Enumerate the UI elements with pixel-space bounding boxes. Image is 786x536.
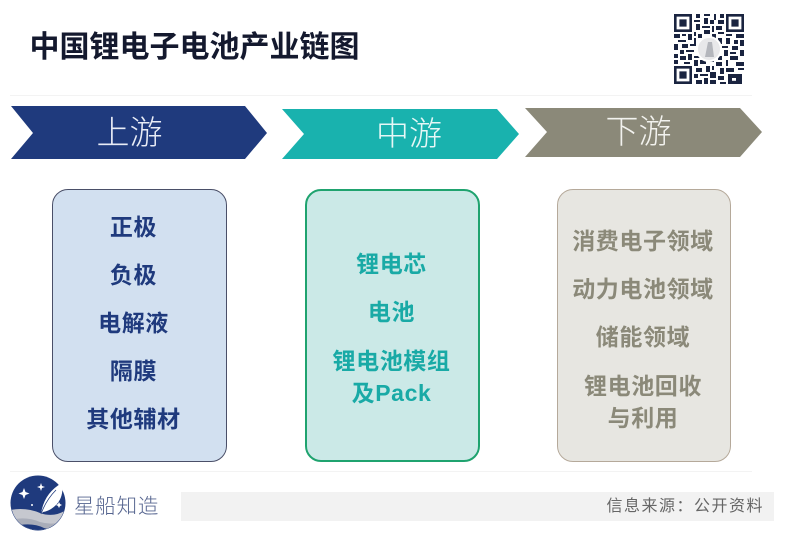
item: 锂电池回收与利用 bbox=[584, 373, 702, 431]
item: 锂电池模组及Pack: 及Pack bbox=[352, 380, 431, 406]
arrow: 中游 bbox=[282, 109, 519, 159]
item: 负极: 负极 bbox=[110, 262, 157, 288]
item: 锂电池模组及Pack: 锂电池模组 bbox=[332, 348, 450, 374]
panel: midstream bbox=[305, 189, 480, 462]
arrow: 下游: 下游 bbox=[606, 113, 672, 150]
panel: upstream bbox=[52, 189, 227, 462]
title: 中国锂电子电池产业链图 bbox=[30, 31, 360, 64]
arrow: 上游: 上游 bbox=[96, 114, 162, 151]
icon: QR code bbox=[674, 14, 744, 84]
item: 锂电池回收与利用: 与利用 bbox=[608, 405, 678, 431]
arrow: 上游 bbox=[11, 106, 267, 159]
item: 锂电芯: 锂电芯 bbox=[356, 251, 427, 277]
icon: logo bbox=[10, 476, 66, 530]
item: 正极: 正极 bbox=[110, 214, 157, 240]
item: 消费电子领域: 消费电子领域 bbox=[572, 228, 714, 254]
item: 锂电池回收与利用: 锂电池回收 bbox=[584, 373, 702, 399]
item: 电解液: 电解液 bbox=[98, 310, 169, 336]
brand name: 星船知造 bbox=[74, 495, 159, 518]
divider bottom bbox=[10, 471, 752, 472]
item: 电池: 电池 bbox=[368, 299, 415, 325]
arrow: 下游 bbox=[525, 108, 762, 157]
item: 动力电池领域: 动力电池领域 bbox=[572, 276, 714, 302]
footer source bar bbox=[181, 492, 774, 521]
item: 储能领域: 储能领域 bbox=[596, 324, 690, 350]
arrow: 中游: 中游 bbox=[376, 115, 442, 152]
item: 隔膜: 隔膜 bbox=[110, 358, 157, 384]
QR centre badge bbox=[697, 37, 721, 61]
panel: downstream bbox=[557, 189, 731, 462]
divider top bbox=[10, 95, 752, 96]
source text: 信息来源：公开资料 bbox=[606, 498, 764, 515]
item: 锂电池模组及Pack bbox=[332, 348, 450, 406]
item: 其他辅材: 其他辅材 bbox=[86, 406, 181, 432]
